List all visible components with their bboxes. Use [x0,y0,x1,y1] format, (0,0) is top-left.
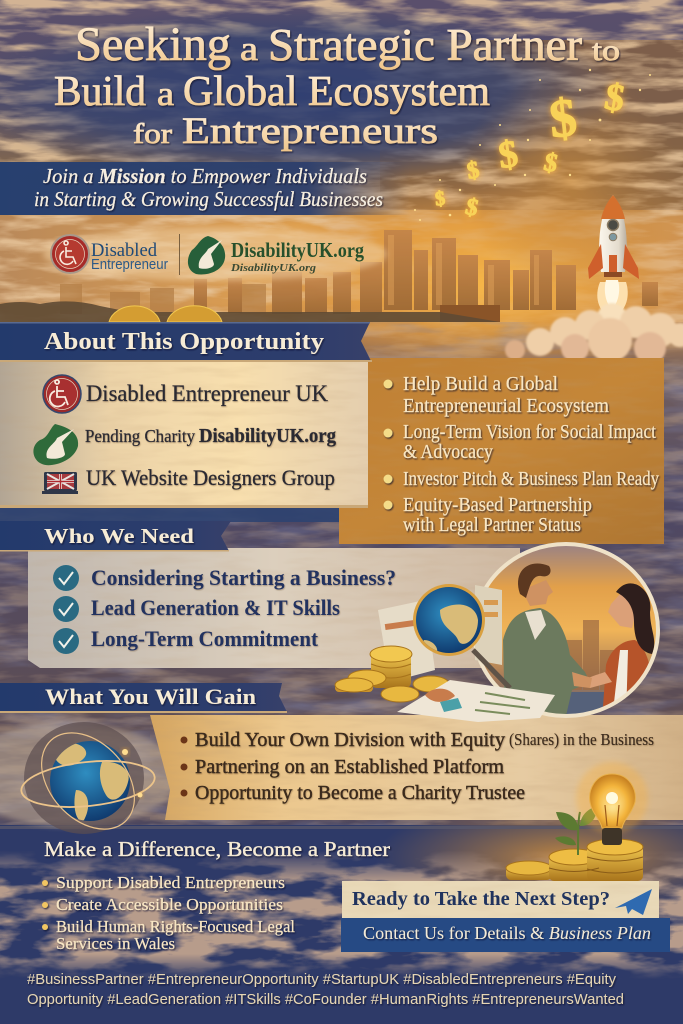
organisation: DisabilityUK.org: Pending Charity [85,426,195,446]
logo: DisabilityUK.org: DisabilityUK.org [230,262,317,274]
partner benefits list: Services in Wales [56,934,175,953]
rising dollar signs: $ [546,87,580,149]
logo: DisabilityUK.org [188,236,364,274]
subtitle text: Join a Mission to Empower Individuals [43,164,367,188]
call to action [341,881,670,952]
rising dollar signs: $ [542,147,560,178]
logo: Disabled Entrepreneur [51,235,168,273]
subtitle text: in Starting & Growing Successful Businesses [34,187,383,211]
title: Entrepreneurs [182,111,438,152]
benefit list: Help Build a Global [403,373,558,395]
rising dollar signs [434,76,628,222]
rocket exhaust clouds [505,303,683,364]
logo: Disabled Entrepreneur: Disabled [91,240,157,261]
panel: what you will gain [150,715,683,820]
title: for [133,118,172,150]
CTA contact button [341,918,670,952]
heading band: About This Opportunity: About This Opportunity [44,329,324,355]
title: to [592,34,620,67]
logos [43,227,387,281]
logo: DisabilityUK.org: DisabilityUK.org [231,238,364,262]
hashtags [27,971,624,1008]
gain list: Build Your Own Division with Equity [195,729,505,751]
gold coins at the horizon [109,306,222,322]
title: Strategic Partner [268,20,582,70]
title: a [240,31,258,68]
panel: about organisations [0,361,368,508]
report papers with charts [397,680,555,722]
magnifier globe [413,584,510,688]
partner benefits list: Create Accessible Opportunities [56,895,283,914]
illustration: documents, magnifier and coins [335,584,555,722]
heading band: Who We Need [0,521,231,552]
rising dollar signs: $ [463,194,481,222]
illustration: globe with orbits [20,722,156,834]
rocket with flame [588,195,639,318]
heading: Make a Difference: Make a Difference, Become a Partner [44,837,390,861]
checklist: Long-Term Commitment [91,626,319,651]
benefit list: with Legal Partner Status [403,514,581,536]
man [503,564,590,720]
organisation: UK Website Designers Group: UK Website Designers Group [86,465,335,490]
rising dollar signs: $ [465,157,481,185]
rising dollar signs: $ [434,188,446,210]
organisation: Disabled Entrepreneur UK [43,375,328,413]
gain list: Opportunity to Become a Charity Trustee [195,782,525,804]
gain list [180,729,654,804]
subtitle text [34,164,383,211]
gain list: Partnering on an Established Platform [195,756,504,778]
woman [590,583,654,706]
coin stacks [335,646,449,702]
rising dollar signs: $ [496,133,521,177]
title [54,18,620,152]
CTA prompt: Ready to Take the Next Step? [352,888,610,910]
checklist [53,565,396,654]
panel: who we need [28,548,520,668]
plant [555,806,598,855]
partner benefits list: Build Human Rights-Focused Legal [56,917,295,936]
heading band: About This Opportunity [0,322,372,362]
organisation: Disabled Entrepreneur UK: Disabled Entrepreneur UK [86,381,328,406]
benefit list [384,373,659,536]
rising dollar signs: $ [602,76,628,120]
checklist: Considering Starting a Business? [91,565,396,590]
illustration: partners shaking hands in circular frame [470,544,670,722]
organisation: DisabilityUK.org: DisabilityUK.org [199,425,336,447]
gain list: (Shares) in the Business [509,730,654,749]
organisation: DisabilityUK.org [33,424,336,465]
title: Build [54,69,146,115]
CTA contact button: Contact Us for Details & Business Plan [363,923,651,943]
checklist: Lead Generation & IT Skills [91,595,340,620]
logo: Disabled Entrepreneur: Entrepreneur [91,256,168,273]
sparkles around dollars [414,59,651,221]
benefit list: & Advocacy [403,441,493,463]
CTA prompt [342,881,659,919]
illustration: coins, plant and lightbulb [506,762,648,881]
partner benefits list: Support Disabled Entrepreneurs [56,873,285,892]
title: a [157,76,174,113]
hashtags: #BusinessPartner #EntrepreneurOpportunity #StartupUK #DisabledEntrepreneurs #Equity [27,971,616,988]
panel: about orange list [339,358,664,544]
lightbulb [576,762,648,845]
hashtags: Opportunity #LeadGeneration #ITSkills #CoFounder #HumanRights #EntrepreneursWanted [27,991,624,1008]
benefit list: Equity-Based Partnership [403,494,592,516]
cloud haze behind globe [0,723,180,827]
partner benefits list [42,873,295,953]
heading band: What You Will Gain: What You Will Gain [45,684,256,709]
icon: paper plane [615,889,652,915]
title: Global Ecosystem [183,69,490,115]
title: Seeking [75,18,231,71]
city skyline [0,230,658,322]
benefit list: Entrepreneurial Ecosystem [403,395,609,417]
heading band: What You Will Gain [0,683,287,713]
heading band: Who We Need: Who We Need [44,524,194,548]
subtitle band [0,162,410,215]
